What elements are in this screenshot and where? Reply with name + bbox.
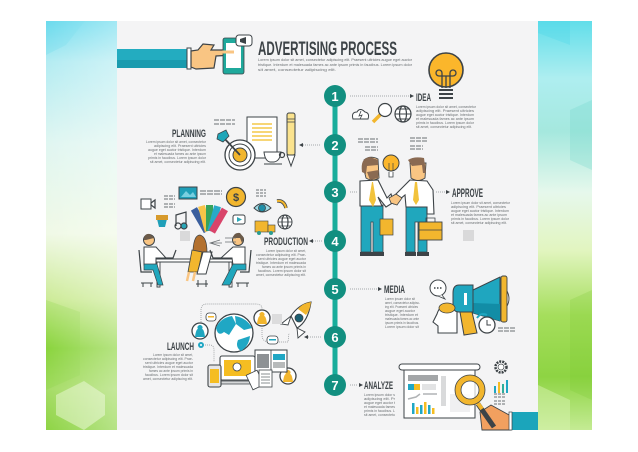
step 2 [324,134,346,156]
icon: speech bubble [430,280,446,299]
arrow: step 2 to planning [299,143,320,147]
text block: analyze: Lorem ipsum dolor s [364,392,395,397]
icon: pencil [287,113,295,166]
left briefcase [380,219,393,235]
step 4: 4 [331,234,339,249]
globe [215,314,253,352]
text block: planning: Lorem ipsum dolor sit amet, consectetur [146,139,207,144]
panel: left geometric strip [46,21,117,430]
watermark square [272,314,282,324]
text block: approve: sit amet, consectetur adipiscing elit. [451,220,507,225]
text block: idea: augue eget auctor tristique. Interdum [416,112,474,117]
step 5: 5 [331,282,339,297]
icon: phone with speech bubble [222,35,252,74]
icon: arm pointing at phone [117,44,234,69]
text block: production: tristique. Interdum et malesuada [256,260,307,265]
heading: planning: PLANNING [172,128,206,140]
arrow: step 6 to launch [304,335,322,339]
icon: globe [395,106,411,122]
icon: hand holding magnifier [455,375,538,430]
arrow: step 1 to idea [350,94,414,98]
chart: small bars [494,380,508,393]
text block: media: Lorem ipsum dolor sit [385,324,420,329]
text block: approve: primis in faucibus. Lorem ipsum dolor [451,216,510,221]
small caption lines: media icons [164,190,266,207]
icon: music note [175,212,187,229]
title: ADVERTISING PROCESS [258,38,397,60]
panel: right geometric strip [538,21,592,430]
left man body [360,180,394,207]
text block: launch [143,352,194,381]
text block: idea: adipiscing elit. Praesent ultricies [416,108,474,113]
target dot [198,342,204,348]
person left [139,234,176,287]
step 7: 7 [331,378,339,393]
icon: eye [254,204,271,212]
text block: production [256,248,307,277]
icon: telephone handset [277,201,286,208]
table [155,259,233,287]
text block: media: tristique. Interdum et [385,312,419,317]
text block: planning: adipiscing elit. Praesent ultricies [154,143,206,148]
text block: media: amet, consectetur adipisc- [385,300,421,305]
text block: production: faucibus. Lorem ipsum dolor sit [258,268,307,273]
documents [246,370,272,390]
text block: approve: Lorem ipsum dolor sit amet, consectetur [451,200,511,205]
text block: intro: sit amet, consectetur adipiscing elit. [258,67,336,72]
speech bubbles [206,313,216,321]
text block: production: sent ultricies augue eget auctor [258,256,307,261]
text block: intro: tristique. Interdum et malesuada fames ac ante ipsum primis in faucibus. Lorem ipsum dolor [258,62,413,67]
text block: media: Lorem ipsum dolor sit [385,296,416,301]
tablet [208,365,221,387]
text block: idea: primis in faucibus. Lorem ipsum dolor [416,120,475,125]
step 6 [324,326,346,348]
arrow: step 4 to production [309,239,322,243]
avatar top right [254,310,270,326]
heading: launch: LAUNCH [167,341,194,353]
rocket [281,302,311,338]
right man head [410,163,426,180]
right man body [391,180,434,214]
text block: approve: augue eget auctor tristique. Interdum [451,208,509,213]
step 3: 3 [331,185,339,200]
text block: production: amet, consectetur adipiscing elit. [256,272,306,277]
icon: popcorn [156,215,168,227]
text block: analyze: adipiscing elit. Pr [364,396,396,401]
text block: media: malesuada fames ac ante [385,316,419,321]
laptop [217,356,257,384]
step 1: 1 [331,89,339,104]
text block: planning: sit amet, consectetur adipiscing elit. [150,159,206,164]
timeline [324,85,346,396]
icon: cloud [352,110,369,119]
text block: launch: faucibus. Lorem ipsum dolor sit [145,372,194,377]
text block: idea: et malesuada fames ac ante ipsum [416,116,474,121]
arrow: step 7 to analyze [350,383,363,387]
small caption lines: planning [214,120,235,124]
step 7 [324,374,346,396]
text block: launch: sent ultricies augue eget auctor [145,360,194,365]
icon: dollar coin [226,188,246,206]
avatar bottom right [280,368,296,384]
chart: presentation board [399,364,480,418]
step 3 [324,181,346,203]
text block: launch: amet, consectetur adipiscing elit. [143,376,193,381]
left man head [364,157,379,180]
small caption and arrow [210,238,236,246]
text block: approve [451,200,511,225]
icon: brain [439,303,455,313]
person right [210,233,251,287]
light bulb [383,155,399,177]
heading: production: PRODUCTION [264,236,308,248]
text block: analyze: primis in faucibus. L [364,408,396,413]
illustration: handshake businessmen [358,138,442,256]
text block: idea: sit amet, consectetur adipiscing elit. [416,124,472,129]
heading: media: MEDIA [384,284,405,296]
small caption lines: analyze [494,394,506,404]
text block: launch: fames ac ante ipsum primis in [149,368,193,373]
text block: media: augue eget auctor [385,308,416,313]
icon: gear [496,362,506,372]
icon: play button [233,215,245,224]
open book [255,350,287,372]
text block: approve: et malesuada fames ac ante ipsum [451,212,507,217]
text block: approve: adipiscing elit. Praesent ultricies [451,204,506,209]
icon: globe small [278,215,292,229]
icon: dollar coin: $ [233,192,239,204]
icon: colour swatch fan [191,205,228,234]
text block: production: fames ac ante ipsum primis in [262,264,306,269]
watermark square [463,230,474,241]
heading: analyze: ANALYZE [364,380,393,392]
text block: analyze: et malesuada fames [364,404,395,409]
icon: magnifier [373,104,392,122]
illustration: launch network [192,302,311,390]
text block: media: ipsum primis in faucibus. [385,320,419,325]
text block: launch: tristique. Interdum et malesuada [143,364,194,369]
step 5 [324,278,346,300]
icon: alarm clock [477,314,495,333]
text block: production: consectetur adipiscing elit. Prae- [256,252,307,257]
handshake hands [389,194,402,205]
icon: target and dart [217,130,255,170]
captions [358,138,428,150]
text block: planning [146,139,207,164]
icon: large light bulb [429,53,463,98]
step 4 [324,230,346,252]
left man legs [361,205,383,252]
text block: analyze: augue eget auctor t [364,400,396,405]
text block: idea: Lorem ipsum dolor sit amet, consectetur [416,104,477,109]
icon: video camera [141,199,155,209]
text block: analyze: sit amet, consectetu [364,412,395,417]
icon: document [247,117,277,158]
text block: planning: et malesuada fames ac ante ipsum [154,151,206,156]
step 2: 2 [331,138,339,153]
text block: launch: consectetur adipiscing elit. Prae- [143,356,194,361]
heading: approve: APPROVE [452,186,483,200]
text block: media: ing elit. Praesent ultricies [385,304,418,309]
text block: idea [416,104,477,129]
text block: intro: Lorem ipsum dolor sit amet, consectetur adipiscing elit. Praesent ultricies augue eget auctor [258,57,413,62]
text block: planning: primis in faucibus. Lorem ipsum dolor [148,155,207,160]
icon: coffee cup [264,152,284,164]
person middle [187,235,212,287]
text block: planning: augue eget auctor tristique. Interdum [148,147,206,152]
icon: megaphone [453,276,509,335]
panel: central background [117,21,538,430]
avatar left [192,323,208,339]
watermark square [180,231,190,241]
arrow: step 3 to approve [350,190,450,194]
text block: intro [258,57,413,72]
illustration: office meeting [139,231,251,287]
text block: production: Lorem ipsum dolor sit amet, [266,248,306,253]
text block: launch: Lorem ipsum dolor sit amet, [153,352,193,357]
heading: idea: IDEA [416,92,431,104]
text block: media [385,296,421,329]
right briefcase [419,218,442,240]
icon: delivery truck [255,221,275,235]
text block: analyze [364,392,396,417]
icon: picture frame [179,187,197,199]
icon: head profile [433,304,457,333]
right man legs [406,207,427,252]
small caption lines: media [498,328,515,331]
step 6: 6 [331,330,339,345]
bar chart [412,402,434,414]
arrow: step 5 to media [350,287,382,291]
step 1 [324,85,346,107]
